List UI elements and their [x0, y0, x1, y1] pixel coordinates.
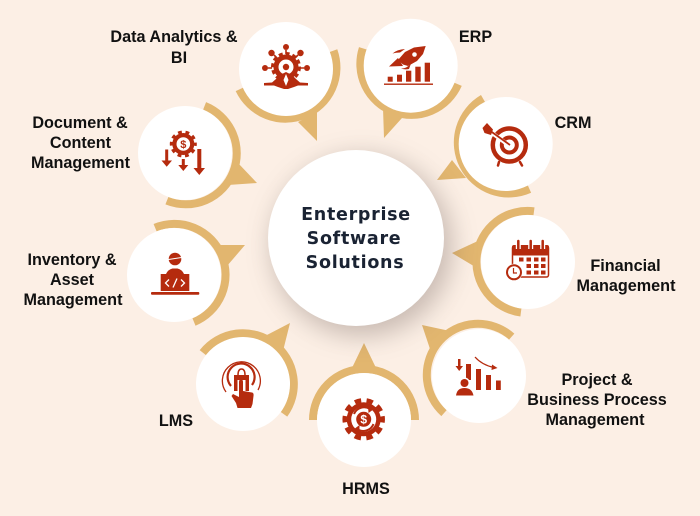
panel: center hub — [268, 150, 452, 336]
icon: target with arrow — [482, 123, 526, 166]
panel: Data Analytics & BI — [110, 22, 336, 141]
speech ring: ERP — [360, 48, 458, 138]
label: Financial Management: Financial — [590, 257, 661, 275]
title: Enterprise Software Solutions: Enterprise — [301, 205, 411, 225]
label: Project & Business Process Management: Business Process — [527, 391, 667, 409]
panel: HRMS — [313, 343, 415, 498]
speech ring: Data Analytics — [239, 51, 336, 141]
label: Project & Business Process Management: Management — [546, 411, 645, 429]
white circle: Project — [432, 329, 526, 423]
label: Document & Content Management: Content — [50, 134, 112, 152]
panel: CRM — [437, 97, 591, 193]
label: CRM: CRM — [555, 114, 591, 132]
white circle: LMS — [196, 337, 290, 431]
hub shadow — [272, 156, 452, 336]
icon: calendar and clock — [506, 240, 549, 281]
label: Document & Content Management: Document & — [32, 114, 128, 132]
speech ring: CRM — [437, 98, 530, 193]
icon: hand touching lock — [222, 362, 260, 408]
panel: Project & Business Process Management — [422, 324, 667, 429]
white circle: Document — [138, 106, 232, 200]
label: ERP: ERP — [459, 28, 492, 46]
speech ring: Financial — [452, 211, 534, 312]
label: Project & Business Process Management: Project & — [561, 371, 633, 389]
hub circle — [268, 150, 444, 326]
icon: data analytics — [262, 44, 310, 89]
white circle: Data Analytics — [239, 22, 333, 116]
icon: declining bars and person — [456, 357, 501, 396]
panel: LMS — [159, 323, 294, 431]
white circle: Inventory — [127, 228, 221, 322]
speech ring: Document — [167, 106, 257, 204]
label: Inventory & Asset Management: Inventory & — [27, 251, 117, 269]
title: Enterprise Software Solutions: Solutions — [306, 253, 404, 273]
icon: gear with dollar: $ — [360, 412, 367, 426]
panel: Inventory & Asset Management — [24, 224, 245, 322]
icon: gear with dollar — [345, 400, 383, 438]
label: Inventory & Asset Management: Asset — [50, 271, 95, 289]
white circle: CRM — [459, 97, 553, 191]
speech ring: LMS — [203, 323, 294, 414]
white circle: HRMS — [317, 373, 411, 467]
white circle: ERP — [364, 19, 458, 113]
label: Document & Content Management: Management — [31, 154, 131, 172]
label: Inventory & Asset Management: Management — [24, 291, 123, 309]
title: Enterprise Software Solutions: Software — [307, 229, 401, 249]
icon: developer at laptop — [151, 253, 199, 295]
panel: ERP — [360, 19, 492, 138]
label: LMS: LMS — [159, 412, 193, 430]
label: HRMS: HRMS — [342, 480, 390, 498]
speech ring: Project — [422, 324, 512, 413]
icon: gear with dollar and down arrows: $ — [180, 139, 186, 151]
label: Financial Management: Management — [577, 277, 676, 295]
panel: Financial Management — [452, 211, 676, 312]
icon: rocket and rising bars — [384, 46, 433, 85]
white circle: Financial — [481, 215, 575, 309]
icon: gear with dollar and down arrows — [162, 132, 205, 175]
panel: Document & Content Management — [31, 106, 257, 204]
speech ring: Inventory — [155, 224, 245, 322]
speech ring: HRMS — [313, 343, 415, 420]
label: Data Analytics & BI: BI — [171, 49, 187, 67]
label: Data Analytics & BI: Data Analytics & — [110, 28, 238, 46]
